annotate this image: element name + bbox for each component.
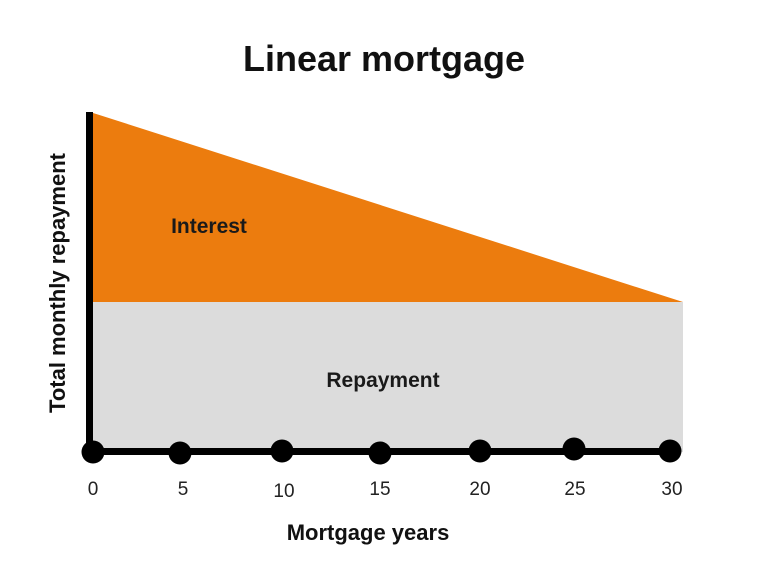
x axis tick labels: 15 <box>369 479 391 500</box>
x axis tick labels: 20 <box>469 479 491 500</box>
x axis tick labels <box>88 479 683 502</box>
y axis title: Total monthly repayment <box>45 152 70 413</box>
label: repayment: Repayment <box>326 369 440 392</box>
x axis tick labels: 30 <box>661 479 683 500</box>
x axis tick labels: 10 <box>273 481 295 502</box>
x axis tick labels: 5 <box>178 479 188 500</box>
x axis tick labels: 25 <box>564 479 586 500</box>
area: interest <box>90 112 683 302</box>
x axis tick labels: 0 <box>88 479 98 500</box>
title: Linear mortgage <box>243 38 525 79</box>
label: interest: Interest <box>171 215 247 238</box>
chart: linear mortgage areas <box>90 112 683 452</box>
x axis with dots <box>82 438 682 464</box>
x axis title: Mortgage years <box>287 520 449 545</box>
y axis <box>86 112 93 456</box>
area: repayment <box>90 302 683 452</box>
